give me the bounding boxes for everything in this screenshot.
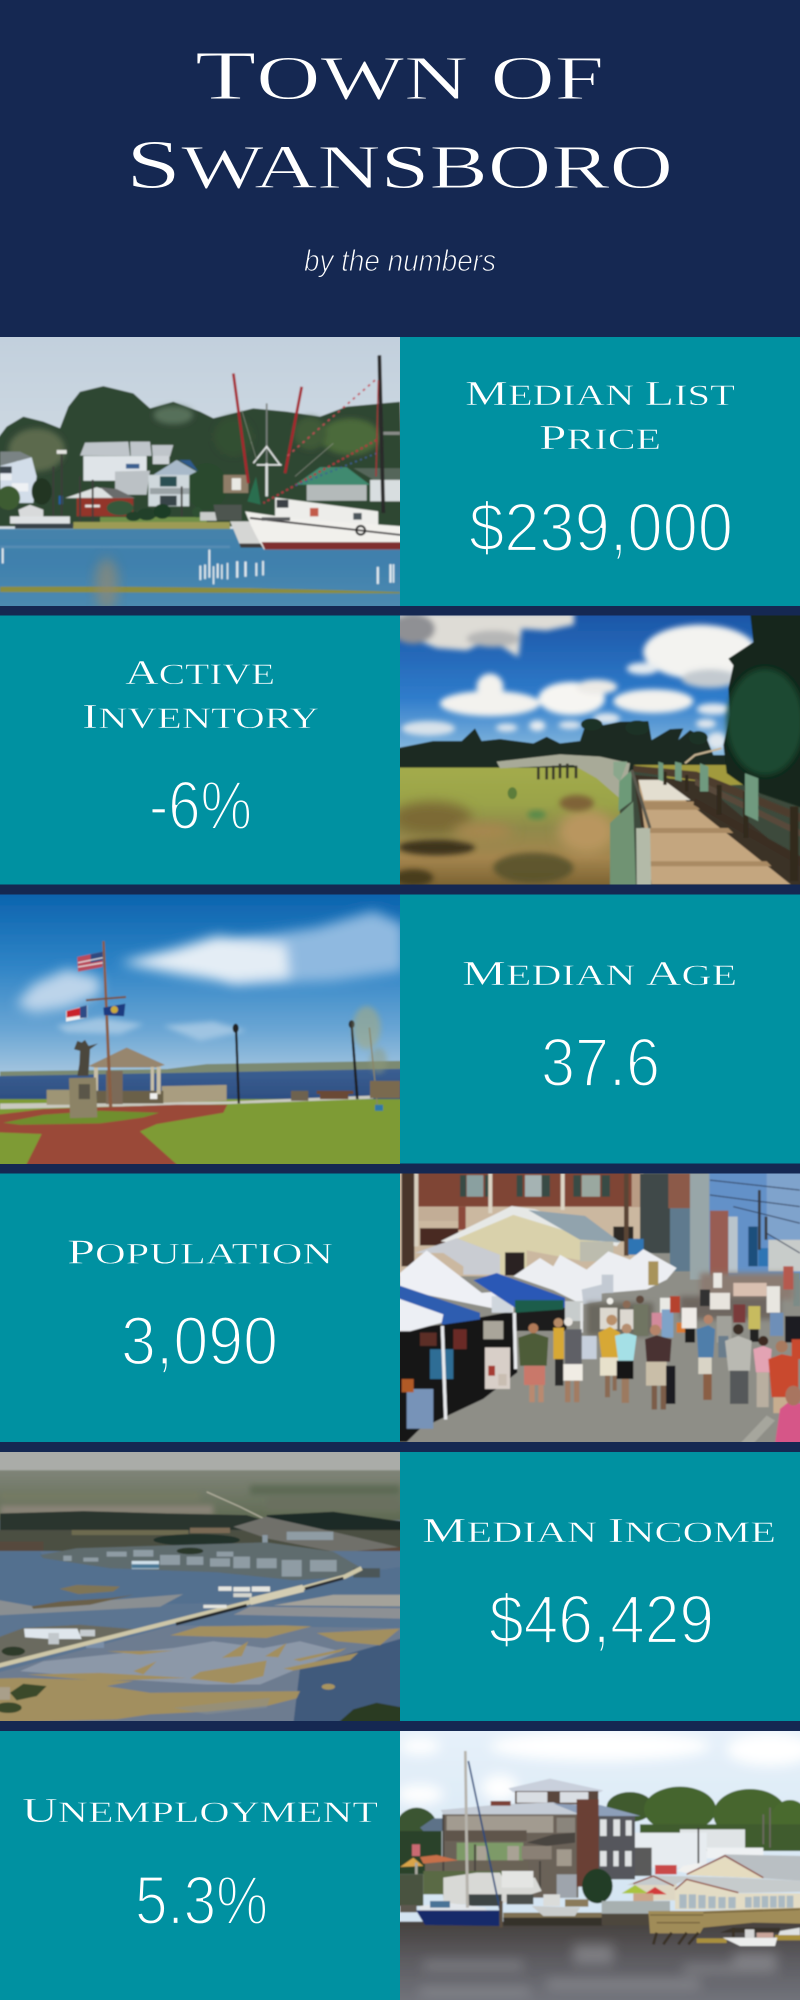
sky — [0, 1449, 403, 1472]
water — [397, 1922, 800, 2000]
boats — [203, 1586, 270, 1608]
lawn and shoreline — [100, 517, 207, 522]
right buildings and sky — [708, 1170, 800, 1280]
label: INVENTORY — [82, 697, 319, 736]
clouds — [200, 911, 403, 984]
label: M EDIAN L IST — [465, 374, 735, 413]
marsh flats base — [0, 1625, 403, 1724]
boats behind the sailboat — [443, 1873, 542, 1904]
value: 37.6 — [541, 1024, 660, 1101]
left shore — [0, 1625, 140, 1666]
street crowd — [518, 1266, 800, 1444]
value: -6% — [149, 767, 252, 844]
water — [0, 529, 403, 609]
background crowd — [587, 1273, 793, 1336]
row: unemployment — [0, 1728, 800, 2000]
red tent — [655, 1865, 677, 1874]
masts and rigging — [233, 355, 400, 513]
title — [126, 38, 673, 204]
value: $46,429 — [489, 1581, 714, 1658]
water — [0, 1551, 403, 1727]
restaurant — [687, 1854, 800, 1881]
title: T OWN OF — [195, 38, 604, 115]
title: S WANSBORO — [126, 127, 673, 204]
photo: shrimp boats on the waterfront — [0, 337, 400, 606]
boat — [230, 521, 263, 547]
distant boardwalk — [497, 754, 630, 801]
main roof — [441, 1802, 580, 1814]
row: population — [0, 1170, 800, 1445]
right wing — [598, 1814, 635, 1879]
deck — [633, 775, 800, 888]
lamps — [235, 1031, 240, 1103]
sailboat — [420, 1903, 488, 1913]
panel: population — [0, 1174, 400, 1442]
row: median income — [0, 1449, 800, 1727]
value: 3,090 — [121, 1302, 278, 1380]
green-roofed house — [353, 468, 403, 480]
value: $239,000 — [469, 489, 733, 566]
bottom corner trees and house — [338, 1703, 403, 1723]
photo: boardwalk through the marsh — [400, 616, 800, 884]
photo: street festival crowd — [400, 1174, 800, 1442]
green panels — [613, 762, 627, 782]
gazebo — [88, 1048, 165, 1068]
tan deck — [648, 1908, 800, 1933]
town on the shore — [40, 1542, 362, 1580]
label: M EDIAN INCOME — [422, 1511, 776, 1550]
label: P RICE — [539, 418, 661, 457]
row: active inventory — [0, 612, 800, 888]
main building body — [443, 1811, 578, 1898]
water — [0, 1069, 403, 1109]
left tents — [400, 1250, 513, 1313]
chimney — [577, 1799, 599, 1887]
row of white tents — [513, 1249, 677, 1304]
pedestal — [69, 1077, 97, 1118]
brick building — [397, 1170, 643, 1276]
flags — [77, 952, 103, 972]
value: 5.3% — [135, 1862, 268, 1939]
treeline — [0, 386, 403, 526]
panel: active inventory — [0, 616, 400, 884]
clouds — [392, 612, 757, 750]
road and mid town — [207, 1492, 267, 1520]
cream house — [441, 1207, 620, 1275]
gray tent — [415, 1238, 500, 1275]
left dock — [400, 1905, 417, 1912]
row: median list price — [0, 334, 800, 611]
right rail — [633, 766, 800, 823]
statue — [74, 1040, 98, 1076]
trees — [607, 1792, 653, 1822]
far marsh beyond the rail — [633, 765, 743, 787]
photo: flags and statue at the waterfront park — [0, 894, 400, 1164]
photo: harbor with sailboat and buildings — [400, 1731, 800, 2000]
fenced pier — [602, 1901, 670, 1914]
islets — [59, 1585, 120, 1594]
marsh grass — [397, 768, 620, 888]
label: P OPULATION — [67, 1232, 333, 1272]
pilings — [2, 548, 394, 584]
white buildings behind — [680, 1829, 745, 1849]
motorboat — [723, 1938, 777, 1946]
benches — [291, 1091, 308, 1101]
sand flats — [0, 1594, 183, 1615]
main building top floor — [508, 1779, 603, 1792]
label — [465, 374, 735, 457]
carnival tent and flag — [400, 1858, 423, 1867]
houses — [0, 452, 32, 466]
panel: median income — [400, 1452, 800, 1721]
flagpole — [102, 941, 112, 1107]
right boat — [778, 1928, 800, 1935]
curb — [740, 1415, 775, 1444]
blue tent — [473, 1273, 565, 1308]
label — [82, 653, 319, 736]
distant land — [0, 1470, 403, 1520]
panel: median age — [400, 894, 800, 1164]
shoppers — [553, 1328, 564, 1359]
ground — [397, 1273, 800, 1445]
panel: median list price — [400, 337, 800, 606]
photo: aerial view of town and bridge — [0, 1452, 400, 1721]
label: M EDIAN A GE — [462, 954, 737, 993]
treeline — [397, 721, 733, 772]
dock railing — [47, 1090, 70, 1105]
small white boat — [532, 1906, 580, 1916]
lawn and walkway — [0, 1099, 403, 1167]
tidal grass strip — [0, 587, 400, 593]
tan marsh islands — [0, 1625, 400, 1723]
right pine tree — [723, 612, 800, 808]
far shore — [0, 1061, 403, 1077]
row: median age — [0, 891, 800, 1167]
bridge — [0, 1568, 362, 1666]
young tree — [353, 1006, 381, 1049]
label: A CTIVE — [125, 653, 275, 692]
label: U NEMPLOYMENT — [22, 1791, 378, 1830]
brick path — [0, 1105, 227, 1167]
umbrellas — [622, 1885, 648, 1893]
panel: unemployment — [0, 1731, 400, 2000]
subtitle: by the numbers — [304, 243, 496, 278]
dark tree — [582, 1869, 613, 1903]
under-tent stalls — [397, 1311, 517, 1442]
